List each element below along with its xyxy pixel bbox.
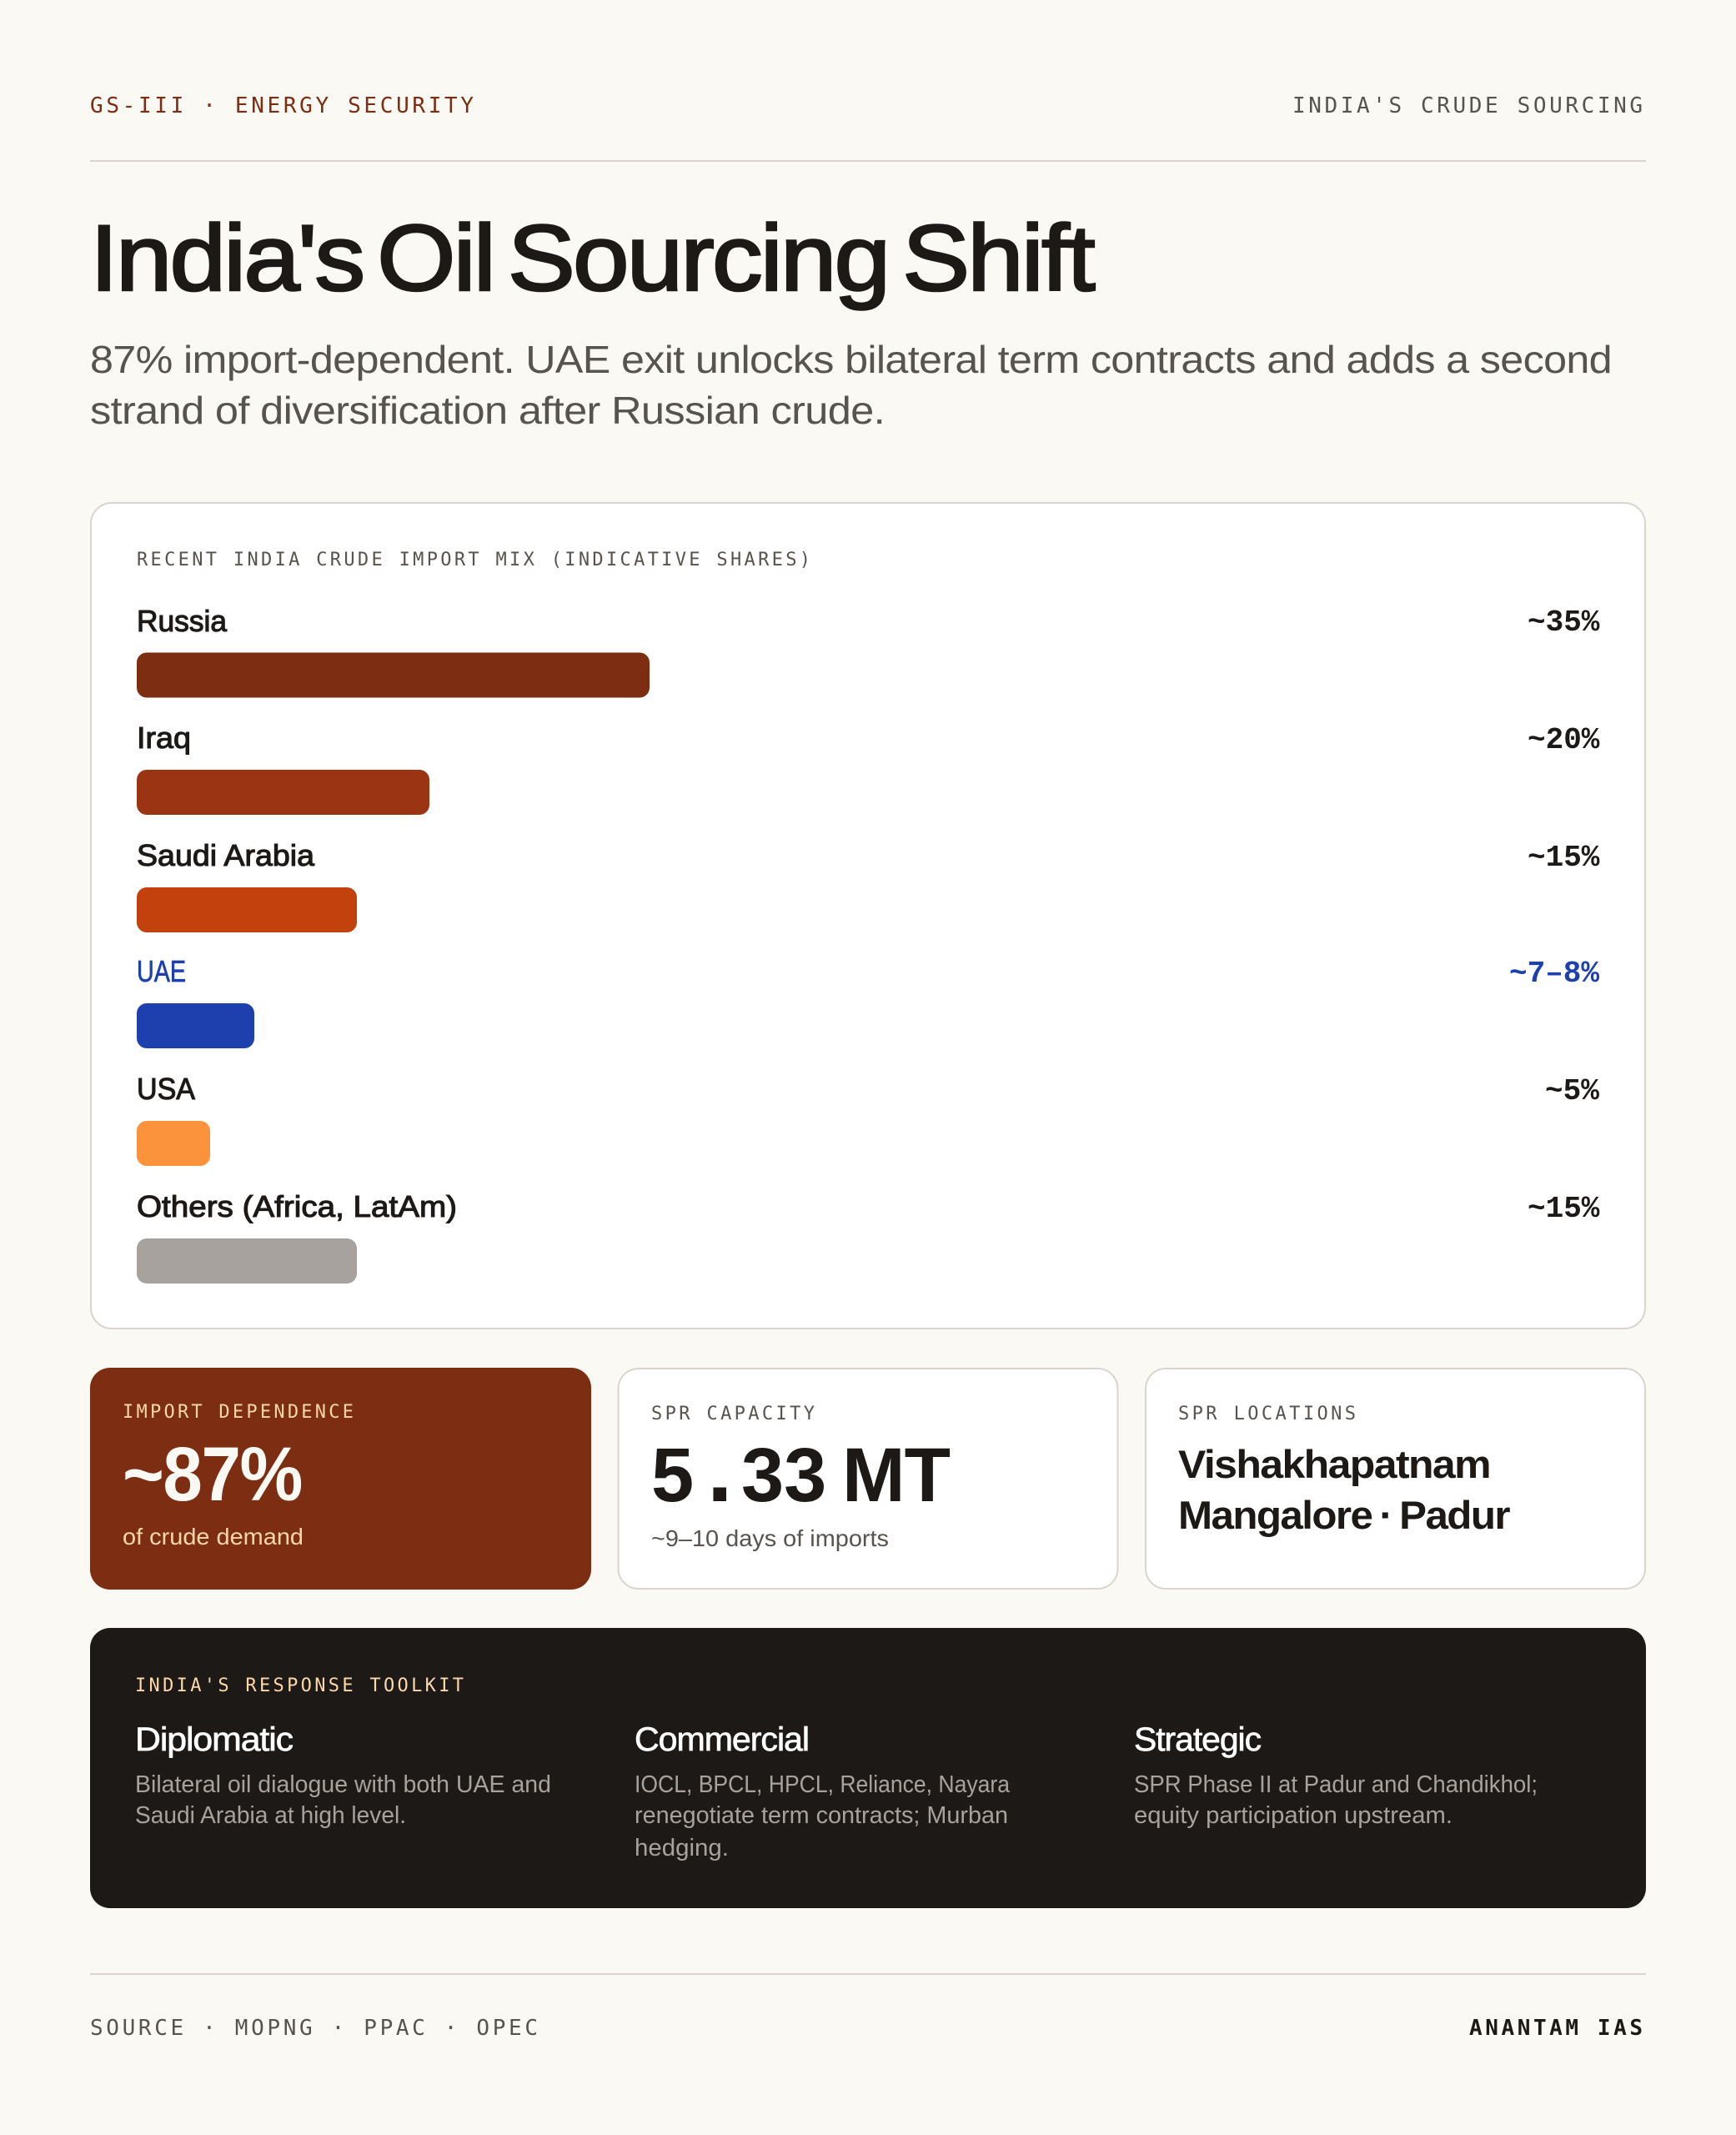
column: Commercial: IOCL, BPCL, HPCL, Reliance, Nayara <box>635 1771 1011 1798</box>
column: Diplomatic: Diplomatic <box>135 1721 293 1758</box>
column: Diplomatic: Bilateral oil dialogue with both UAE and <box>135 1771 551 1798</box>
card label: SPR CAPACITY <box>651 1404 815 1424</box>
subtitle: 87% import-dependent. UAE exit unlocks bilateral term contracts and adds a second <box>90 338 1612 381</box>
card note: of crude demand <box>123 1524 304 1550</box>
row: Russia <box>137 604 1600 697</box>
location lines <box>1178 1442 1510 1537</box>
location lines: Mangalore · Padur <box>1178 1493 1510 1537</box>
header right tag: INDIA'S CRUDE SOURCING <box>1292 93 1643 118</box>
card label: SPR LOCATIONS <box>1178 1404 1356 1424</box>
column: Strategic: Strategic <box>1134 1721 1261 1758</box>
subtitle <box>90 338 1612 432</box>
row: USA: ~5% <box>1545 1074 1599 1108</box>
brand: ANANTAM IAS <box>1469 2016 1643 2041</box>
column: Commercial: renegotiate term contracts; Murban <box>635 1802 1008 1829</box>
row: UAE: UAE <box>137 954 186 988</box>
row: UAE <box>137 954 1599 1048</box>
toolkit heading: INDIA'S RESPONSE TOOLKIT <box>135 1675 464 1696</box>
row: Iraq: Iraq <box>137 721 191 755</box>
row: Iraq <box>137 721 1600 815</box>
row: Saudi Arabia: Saudi Arabia <box>137 838 315 872</box>
card: import dependence <box>90 1368 591 1590</box>
title: India's Oil Sourcing Shift <box>90 206 1096 310</box>
column: Diplomatic: Saudi Arabia at high level. <box>135 1802 406 1829</box>
card value: 5 <box>651 1433 694 1518</box>
panel: import mix bar chart <box>91 503 1645 1329</box>
footer <box>90 2016 1643 2041</box>
card value: ~87% <box>123 1432 302 1517</box>
column: Commercial: hedging. <box>635 1835 729 1861</box>
location lines: Vishakhapatnam <box>1178 1442 1490 1486</box>
card: SPR locations <box>1146 1369 1645 1589</box>
row: USA <box>137 1072 1599 1166</box>
row: USA: USA <box>137 1072 195 1106</box>
column: Commercial <box>635 1721 1011 1861</box>
card: SPR capacity <box>619 1369 1117 1589</box>
panel: response toolkit <box>90 1628 1646 1908</box>
column: Diplomatic <box>135 1721 551 1829</box>
column: Strategic: SPR Phase II at Padur and Chandikhol; <box>1134 1771 1538 1798</box>
column: Strategic <box>1134 1721 1538 1829</box>
card note: ~9–10 days of imports <box>651 1525 889 1551</box>
row: Russia: ~35% <box>1528 605 1600 640</box>
card label: IMPORT DEPENDENCE <box>123 1402 354 1423</box>
source line: SOURCE · MOPNG · PPAC · OPEC <box>90 2016 538 2041</box>
row: Others: Others (Africa, LatAm) <box>137 1189 457 1223</box>
chart heading: RECENT INDIA CRUDE IMPORT MIX (INDICATIVE SHARES) <box>137 550 810 570</box>
row: Iraq: ~20% <box>1528 723 1600 757</box>
row: Saudi Arabia <box>137 838 1600 932</box>
subtitle: strand of diversification after Russian crude. <box>90 389 885 432</box>
column: Commercial: Commercial <box>635 1721 809 1758</box>
column: Strategic: equity participation upstream. <box>1134 1802 1453 1829</box>
card value: . <box>707 1419 733 1521</box>
row: Russia: Russia <box>137 604 228 638</box>
header left tag: GS-III · ENERGY SECURITY <box>90 93 474 118</box>
card value: MT <box>842 1433 951 1518</box>
card value <box>651 1419 951 1521</box>
row: UAE: ~7–8% <box>1509 957 1599 991</box>
row: Others <box>137 1189 1600 1284</box>
card value: 33 <box>741 1433 826 1518</box>
row: Saudi Arabia: ~15% <box>1528 841 1600 875</box>
row: Others: ~15% <box>1528 1192 1600 1226</box>
header <box>90 93 1643 118</box>
